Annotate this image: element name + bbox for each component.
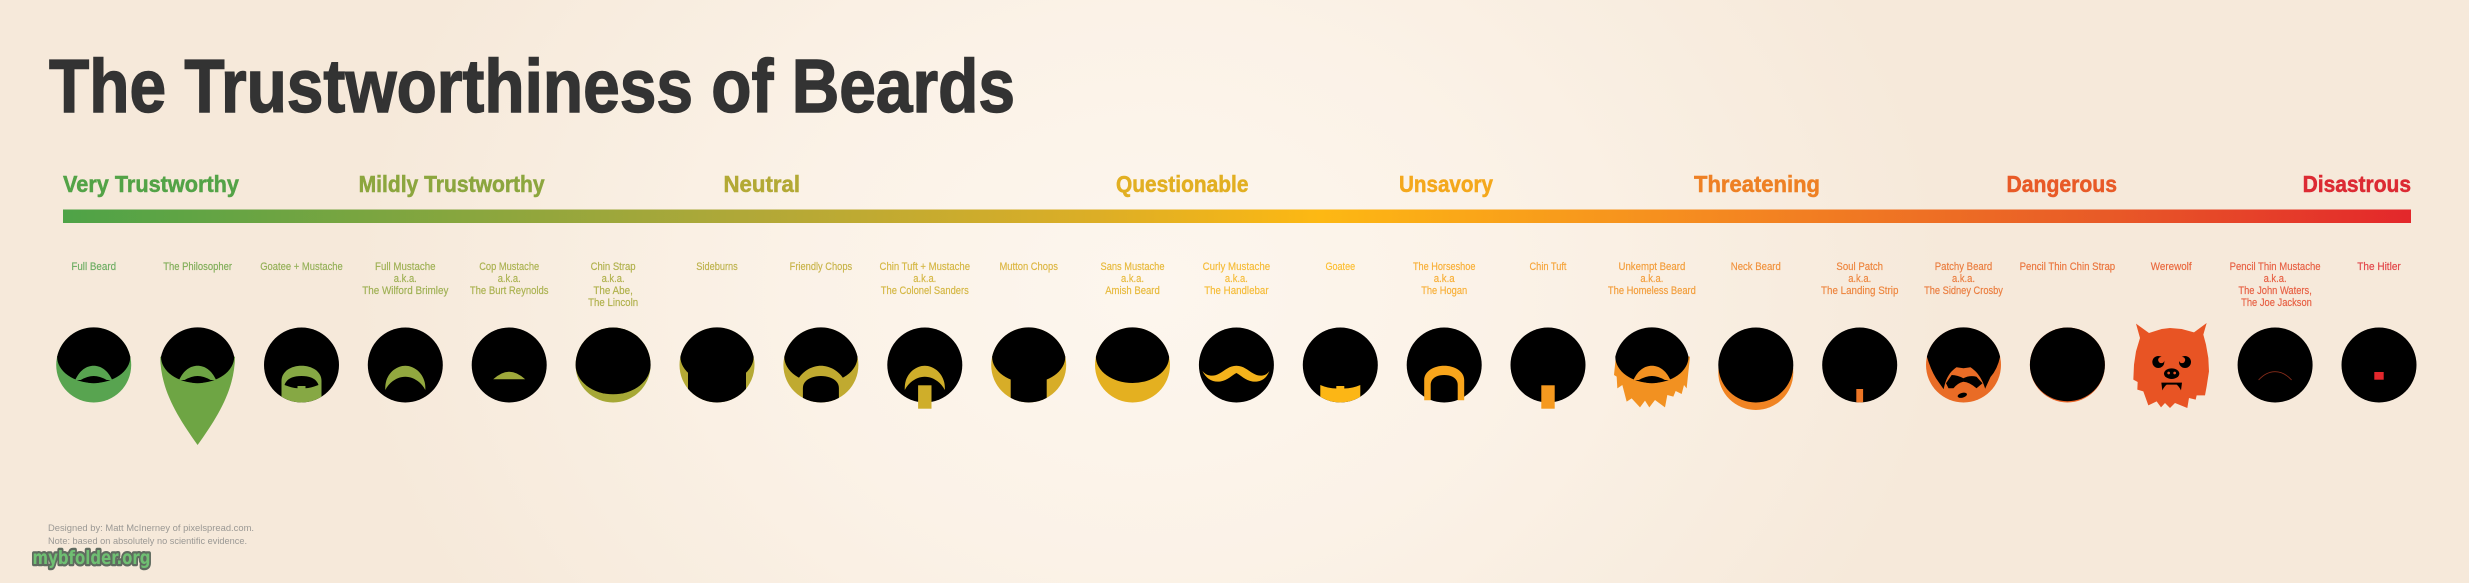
heading: Questionable: Questionable xyxy=(1116,171,1248,197)
icon xyxy=(368,328,443,402)
beard: Neck Beard xyxy=(1718,261,1793,410)
label: a.k.a. xyxy=(1848,273,1871,285)
icon xyxy=(1407,328,1482,402)
label xyxy=(1413,261,1475,297)
label: Werewolf xyxy=(2151,261,2192,273)
label: Pencil Thin Mustache xyxy=(2230,261,2321,273)
heading: Disastrous: Disastrous xyxy=(2303,171,2411,197)
label: The Hogan xyxy=(1421,285,1467,297)
beard: The Hitler xyxy=(2342,261,2416,402)
watermark: mybfolder.org xyxy=(32,547,150,569)
beard: Cop Mustache xyxy=(470,261,549,402)
label xyxy=(1203,261,1270,297)
beard: Goatee xyxy=(1303,261,1378,405)
icon xyxy=(1822,328,1897,403)
heading: Dangerous: Dangerous xyxy=(2006,171,2117,197)
icon xyxy=(1095,327,1170,402)
label xyxy=(1924,261,2003,297)
label: Mutton Chops xyxy=(999,261,1058,273)
beard: Full Beard xyxy=(56,261,131,402)
heading: Neutral: Neutral xyxy=(724,171,800,197)
credits note: Note: based on absolutely no scientific evidence. xyxy=(48,536,247,547)
label: a.k.a. xyxy=(394,273,417,285)
label: The Abe, xyxy=(593,285,633,297)
icon xyxy=(1303,328,1378,405)
icon xyxy=(991,327,1066,405)
icon xyxy=(1510,328,1586,409)
beard: Werewolf xyxy=(2133,261,2209,408)
icon xyxy=(2030,328,2105,402)
beard: Goatee + Mustache xyxy=(260,261,343,405)
icon xyxy=(472,328,547,402)
label: The Joe Jackson xyxy=(2241,297,2312,309)
label: Goatee xyxy=(1325,261,1355,273)
label: Sans Mustache xyxy=(1100,261,1164,273)
heading: Unsavory: Unsavory xyxy=(1399,171,1493,197)
label xyxy=(880,261,970,297)
label: Pencil Thin Chin Strap xyxy=(2020,261,2115,273)
label: The Wilford Brimley xyxy=(362,285,449,297)
label xyxy=(362,261,449,297)
label: Sideburns xyxy=(696,261,738,273)
label: Full Mustache xyxy=(375,261,436,273)
beard: Chin Tuft + Mustache xyxy=(880,261,970,409)
label: Amish Beard xyxy=(1105,285,1160,297)
title: The Trustworthiness of Beards xyxy=(49,44,1015,128)
label: Friendly Chops xyxy=(790,261,853,273)
icon xyxy=(2238,328,2313,402)
heading: Mildly Trustworthy: Mildly Trustworthy xyxy=(359,171,545,197)
label: Goatee + Mustache xyxy=(260,261,343,273)
label: a.k.a. xyxy=(2264,273,2287,285)
icon xyxy=(56,327,131,402)
label: Cop Mustache xyxy=(479,261,539,273)
gradient scale bar xyxy=(63,210,2411,223)
beard: Pencil Thin Chin Strap xyxy=(2020,261,2115,402)
icon xyxy=(1199,328,1274,402)
label: Curly Mustache xyxy=(1203,261,1270,273)
beard: Patchy Beard xyxy=(1924,261,2003,402)
label: Neck Beard xyxy=(1731,261,1781,273)
label: Soul Patch xyxy=(1836,261,1883,273)
label: The Horseshoe xyxy=(1413,261,1475,273)
label: Unkempt Beard xyxy=(1618,261,1685,273)
beard: Pencil Thin Mustache xyxy=(2230,261,2321,402)
beard: Curly Mustache xyxy=(1199,261,1274,402)
label: The Hitler xyxy=(2357,261,2401,273)
icon xyxy=(783,327,858,405)
beard: Sans Mustache xyxy=(1095,261,1170,402)
beard: The Horseshoe xyxy=(1407,261,1482,402)
beard: Friendly Chops xyxy=(783,261,858,405)
beard: Mutton Chops xyxy=(991,261,1066,405)
label: a.k.a. xyxy=(1121,273,1144,285)
label: The Sidney Crosby xyxy=(1924,285,2003,297)
label xyxy=(2230,261,2321,309)
beard: Full Mustache xyxy=(362,261,449,402)
label xyxy=(1100,261,1164,297)
icon xyxy=(1718,328,1793,410)
label: The Burt Reynolds xyxy=(470,285,549,297)
label: The Colonel Sanders xyxy=(881,285,969,297)
label: The Lincoln xyxy=(588,297,638,309)
label: a.k.a. xyxy=(1225,273,1248,285)
label xyxy=(588,261,638,309)
label: The John Waters, xyxy=(2238,285,2312,297)
icon xyxy=(2342,328,2416,402)
label xyxy=(1608,261,1696,297)
label: Chin Tuft xyxy=(1530,261,1566,273)
heading: Very Trustworthy: Very Trustworthy xyxy=(63,171,239,197)
label: The Landing Strip xyxy=(1821,285,1898,297)
credits note: Designed by: Matt McInerney of pixelspread.com. xyxy=(48,523,254,534)
label: a.k.a. xyxy=(913,273,936,285)
icon xyxy=(1926,327,2001,402)
beard: Chin Tuft xyxy=(1510,261,1586,409)
label xyxy=(470,261,549,297)
label: The Handlebar xyxy=(1204,285,1269,297)
label: Chin Strap xyxy=(591,261,636,273)
label: Chin Tuft + Mustache xyxy=(880,261,970,273)
beard: Soul Patch xyxy=(1821,261,1898,403)
label xyxy=(1821,261,1898,297)
heading: Threatening: Threatening xyxy=(1694,171,1820,197)
label: The Homeless Beard xyxy=(1608,285,1696,297)
icon xyxy=(160,327,235,445)
icon xyxy=(264,328,339,405)
icon xyxy=(680,327,754,405)
label: Patchy Beard xyxy=(1935,261,1992,273)
label: a.k.a. xyxy=(498,273,521,285)
icon xyxy=(1614,327,1690,407)
label: The Philosopher xyxy=(163,261,232,273)
scale headings xyxy=(63,171,2411,197)
label: a.k.a. xyxy=(1952,273,1975,285)
credits note xyxy=(48,523,254,547)
icon xyxy=(887,328,962,409)
label: a.k.a. xyxy=(602,273,625,285)
label: a.k.a xyxy=(1434,273,1455,285)
label: a.k.a. xyxy=(1640,273,1663,285)
beard: Sideburns xyxy=(680,261,754,405)
beard: The Philosopher xyxy=(160,261,235,445)
beard: Chin Strap xyxy=(576,261,651,402)
icon xyxy=(576,328,651,402)
beard: Unkempt Beard xyxy=(1608,261,1696,407)
label: Full Beard xyxy=(71,261,116,273)
icon xyxy=(2133,323,2209,408)
